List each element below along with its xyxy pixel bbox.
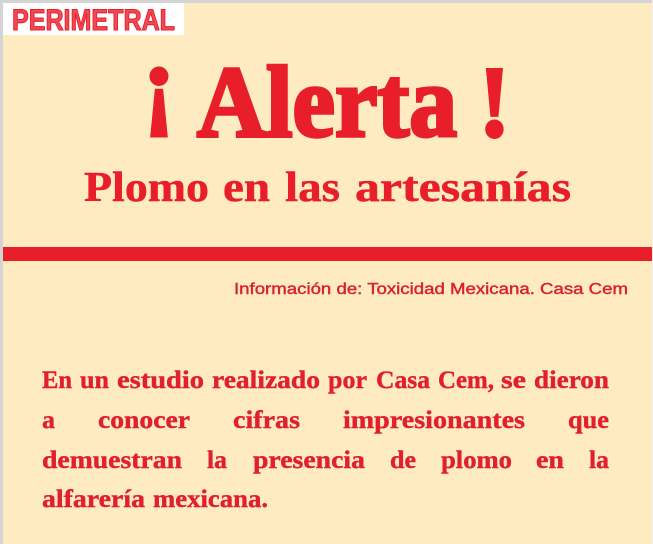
body paragraph: estudio — [117, 367, 204, 394]
right edge strip — [652, 0, 653, 544]
body paragraph: que — [568, 407, 609, 434]
body paragraph: realizado — [212, 367, 320, 394]
subtitle: en — [223, 165, 270, 211]
title: Alerta — [142, 26, 510, 159]
body paragraph: en — [536, 447, 564, 474]
title: Alerta: Alerta — [197, 46, 457, 159]
body paragraph — [42, 367, 610, 513]
body paragraph: la — [207, 447, 228, 474]
title: Alerta: ¡ — [142, 26, 176, 138]
body paragraph: En — [42, 367, 72, 394]
body paragraph: demuestran — [42, 447, 182, 474]
body paragraph: se — [501, 367, 526, 394]
body paragraph: mexicana. — [153, 486, 268, 513]
logo: Perimetral: PERIMETRAL — [12, 4, 175, 37]
body paragraph: Casa — [376, 367, 430, 394]
body paragraph: conocer — [98, 407, 190, 434]
body paragraph: de — [390, 447, 416, 474]
source credit: Información de: Toxicidad Mexicana. Casa Cem — [234, 281, 628, 298]
body paragraph: un — [80, 367, 109, 394]
body paragraph: cifras — [233, 407, 300, 434]
body paragraph: alfarería — [42, 486, 146, 513]
body paragraph: por — [328, 367, 367, 394]
subtitle: artesanías — [355, 165, 571, 211]
title: Alerta: ! — [478, 46, 510, 159]
body paragraph: impresionantes — [343, 407, 525, 434]
red divider bar — [3, 247, 652, 261]
body paragraph: a — [42, 407, 56, 434]
subtitle — [84, 165, 571, 211]
body paragraph: Cem, — [438, 367, 494, 394]
body paragraph: dieron — [534, 367, 609, 394]
subtitle: las — [285, 165, 340, 211]
body paragraph: la — [589, 447, 610, 474]
body paragraph: plomo — [441, 447, 512, 474]
body paragraph: presencia — [253, 447, 366, 474]
subtitle: Plomo — [84, 165, 209, 211]
